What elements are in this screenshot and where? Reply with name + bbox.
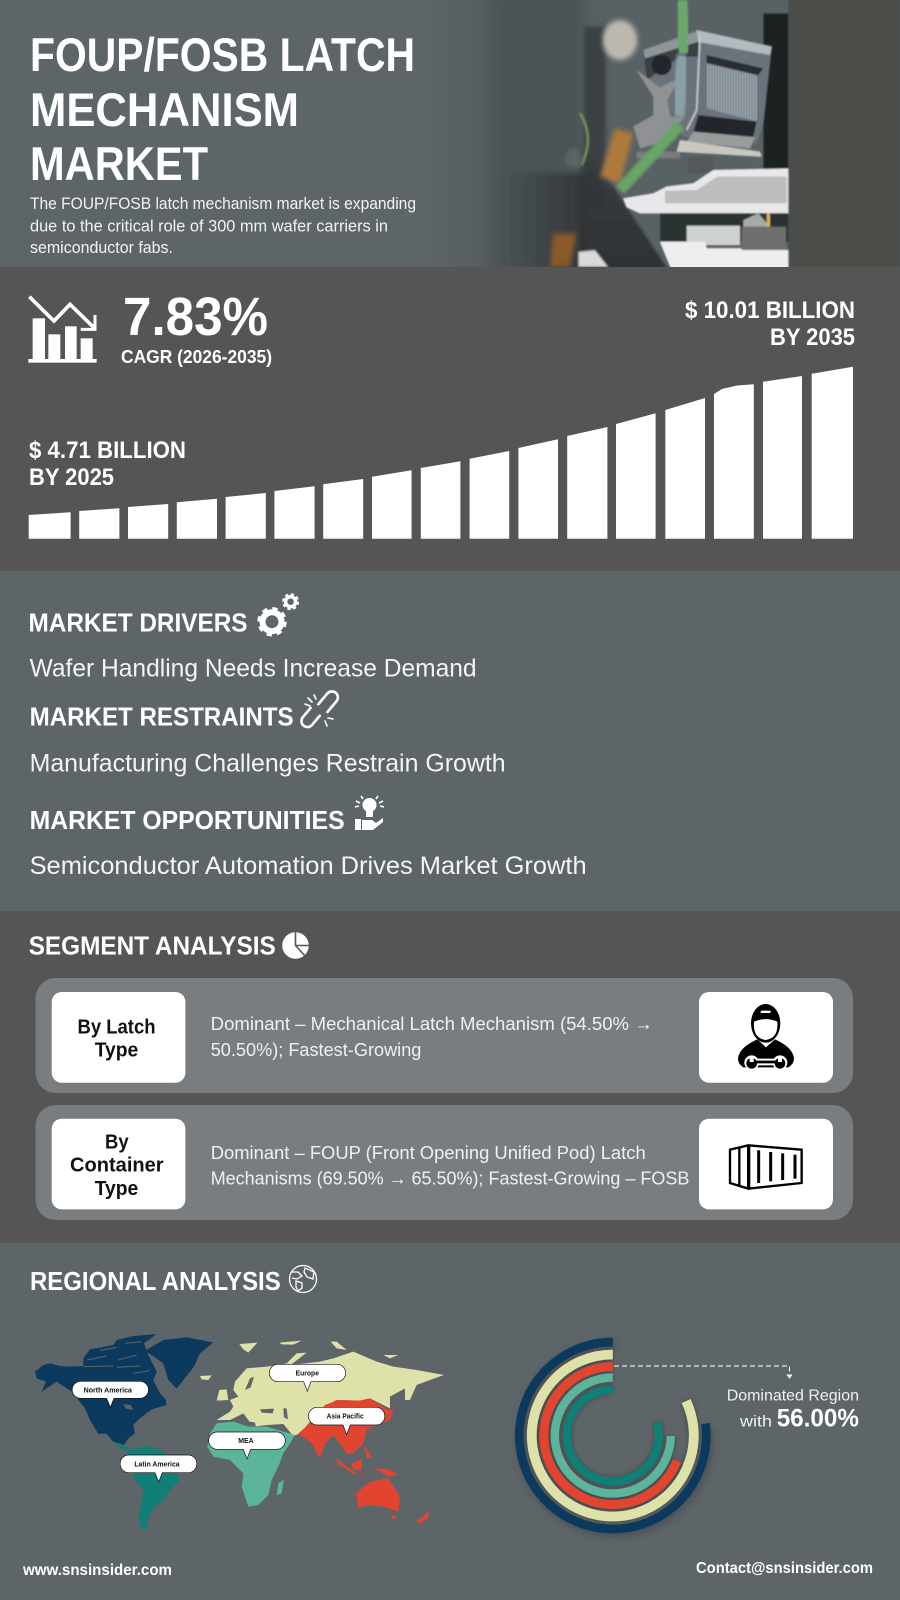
description: The FOUP/FOSB latch mechanism market is expanding xyxy=(30,194,416,213)
region: Asia Pacific xyxy=(298,1398,430,1524)
2025 value: $ 4.71 BILLION xyxy=(29,437,186,464)
cables xyxy=(680,0,686,53)
card: by latch type xyxy=(36,978,853,1093)
heading: regional analysis: REGIONAL ANALYSIS xyxy=(30,1266,281,1296)
icon: CAGR chart xyxy=(28,297,97,363)
title xyxy=(30,28,415,190)
icon: pie chart xyxy=(282,931,310,959)
driver text: Wafer Handling Needs Increase Demand xyxy=(30,655,477,683)
restraint text: Manufacturing Challenges Restrain Growth xyxy=(30,750,506,778)
description: due to the critical role of 300 mm wafer carriers in xyxy=(30,216,388,236)
heading: segment analysis: SEGMENT ANALYSIS xyxy=(29,930,276,960)
title: FOUP/FOSB LATCH xyxy=(30,28,415,81)
panel: segment analysis xyxy=(0,911,900,1243)
container type text: Dominant – FOUP (Front Opening Unified Pod) Latch xyxy=(211,1142,646,1163)
callout: MEA xyxy=(209,1432,285,1459)
label box: by container type: Type xyxy=(95,1178,138,1200)
ring: Asia Pacific xyxy=(544,1366,677,1504)
label box: by container type: Container xyxy=(70,1155,164,1177)
icon: broken link xyxy=(299,689,340,730)
description: semiconductor fabs. xyxy=(30,238,173,257)
icon: bulb and hand xyxy=(355,796,384,830)
opportunity text: Semiconductor Automation Drives Market Growth xyxy=(30,852,587,880)
dominated region label: 56.00% xyxy=(777,1405,859,1433)
heading: market drivers: MARKET DRIVERS xyxy=(28,608,248,638)
carrier body xyxy=(643,30,772,143)
callout: North America xyxy=(72,1381,148,1407)
CAGR label: CAGR (2026-2035) xyxy=(121,347,272,367)
container type text: Mechanisms (69.50% → 65.50%); Fastest-Growing – FOSB xyxy=(211,1168,689,1189)
arrow: dashed leader xyxy=(614,1366,792,1378)
label box: by container type: By xyxy=(105,1131,129,1153)
card: by container type xyxy=(36,1105,853,1220)
region: Europe xyxy=(200,1341,444,1436)
ring: Latin America xyxy=(567,1390,659,1482)
world map xyxy=(35,1334,444,1531)
region: Latin America xyxy=(113,1436,180,1531)
2025 value xyxy=(29,437,186,491)
callout: MEA: MEA xyxy=(238,1438,254,1445)
container type text xyxy=(211,1142,689,1189)
region: North America xyxy=(35,1334,213,1445)
heading: market opportunities: MARKET OPPORTUNITIES xyxy=(30,805,345,835)
callout: Latin America xyxy=(120,1455,197,1482)
title: MECHANISM xyxy=(30,83,299,136)
panel: market dynamics xyxy=(28,595,587,880)
icon box: shipping container xyxy=(699,1119,833,1209)
icon box: mechanic xyxy=(699,992,833,1083)
bracket xyxy=(633,70,684,148)
label box: by latch type xyxy=(52,992,185,1083)
CAGR value: 7.83% xyxy=(123,287,268,347)
dominated region label xyxy=(727,1388,859,1433)
label box: by latch type: By Latch xyxy=(78,1016,156,1038)
label box: by latch type: Type xyxy=(95,1040,138,1062)
radial bar chart xyxy=(519,1342,708,1532)
title: MARKET xyxy=(30,137,208,190)
icon: globe xyxy=(290,1266,316,1292)
ring: Europe xyxy=(532,1354,694,1516)
panel: regional analysis xyxy=(30,1266,859,1532)
platform xyxy=(677,140,762,157)
heading: market restraints: MARKET RESTRAINTS xyxy=(30,702,294,732)
header photo: wafer carrier machine xyxy=(493,0,900,280)
2035 value xyxy=(685,297,855,351)
dominated region label: with xyxy=(739,1414,772,1431)
bar chart xyxy=(29,367,853,539)
callout: Europe xyxy=(269,1364,346,1391)
callout: Europe: Europe xyxy=(296,1371,319,1378)
2035 value: $ 10.01 BILLION xyxy=(685,297,855,324)
tray xyxy=(623,168,788,213)
panel: header xyxy=(0,0,900,280)
2025 value: BY 2025 xyxy=(29,464,114,491)
ring: Middle East and Africa xyxy=(555,1378,671,1494)
label box: by container type xyxy=(52,1119,185,1209)
2035 value: BY 2035 xyxy=(770,324,855,351)
callout: Latin America: Latin America xyxy=(134,1461,180,1468)
footer: contact: Contact@snsinsider.com xyxy=(696,1560,873,1577)
ring: North America xyxy=(519,1342,706,1529)
callout: North America: North America xyxy=(84,1387,132,1394)
region: Middle East and Africa xyxy=(207,1422,295,1507)
footer: website: www.snsinsider.com xyxy=(22,1562,172,1579)
latch type text: 50.50%); Fastest-Growing xyxy=(211,1039,421,1060)
dominated region label: Dominated Region xyxy=(727,1388,859,1405)
callout: Asia Pacific: Asia Pacific xyxy=(327,1414,364,1421)
latch type text: Dominant – Mechanical Latch Mechanism (54.50% → xyxy=(211,1013,653,1034)
callout: Asia Pacific xyxy=(308,1407,385,1435)
icon: gears xyxy=(260,595,298,634)
panel: market size xyxy=(0,267,900,571)
latch type text xyxy=(211,1013,653,1060)
description xyxy=(30,194,416,257)
